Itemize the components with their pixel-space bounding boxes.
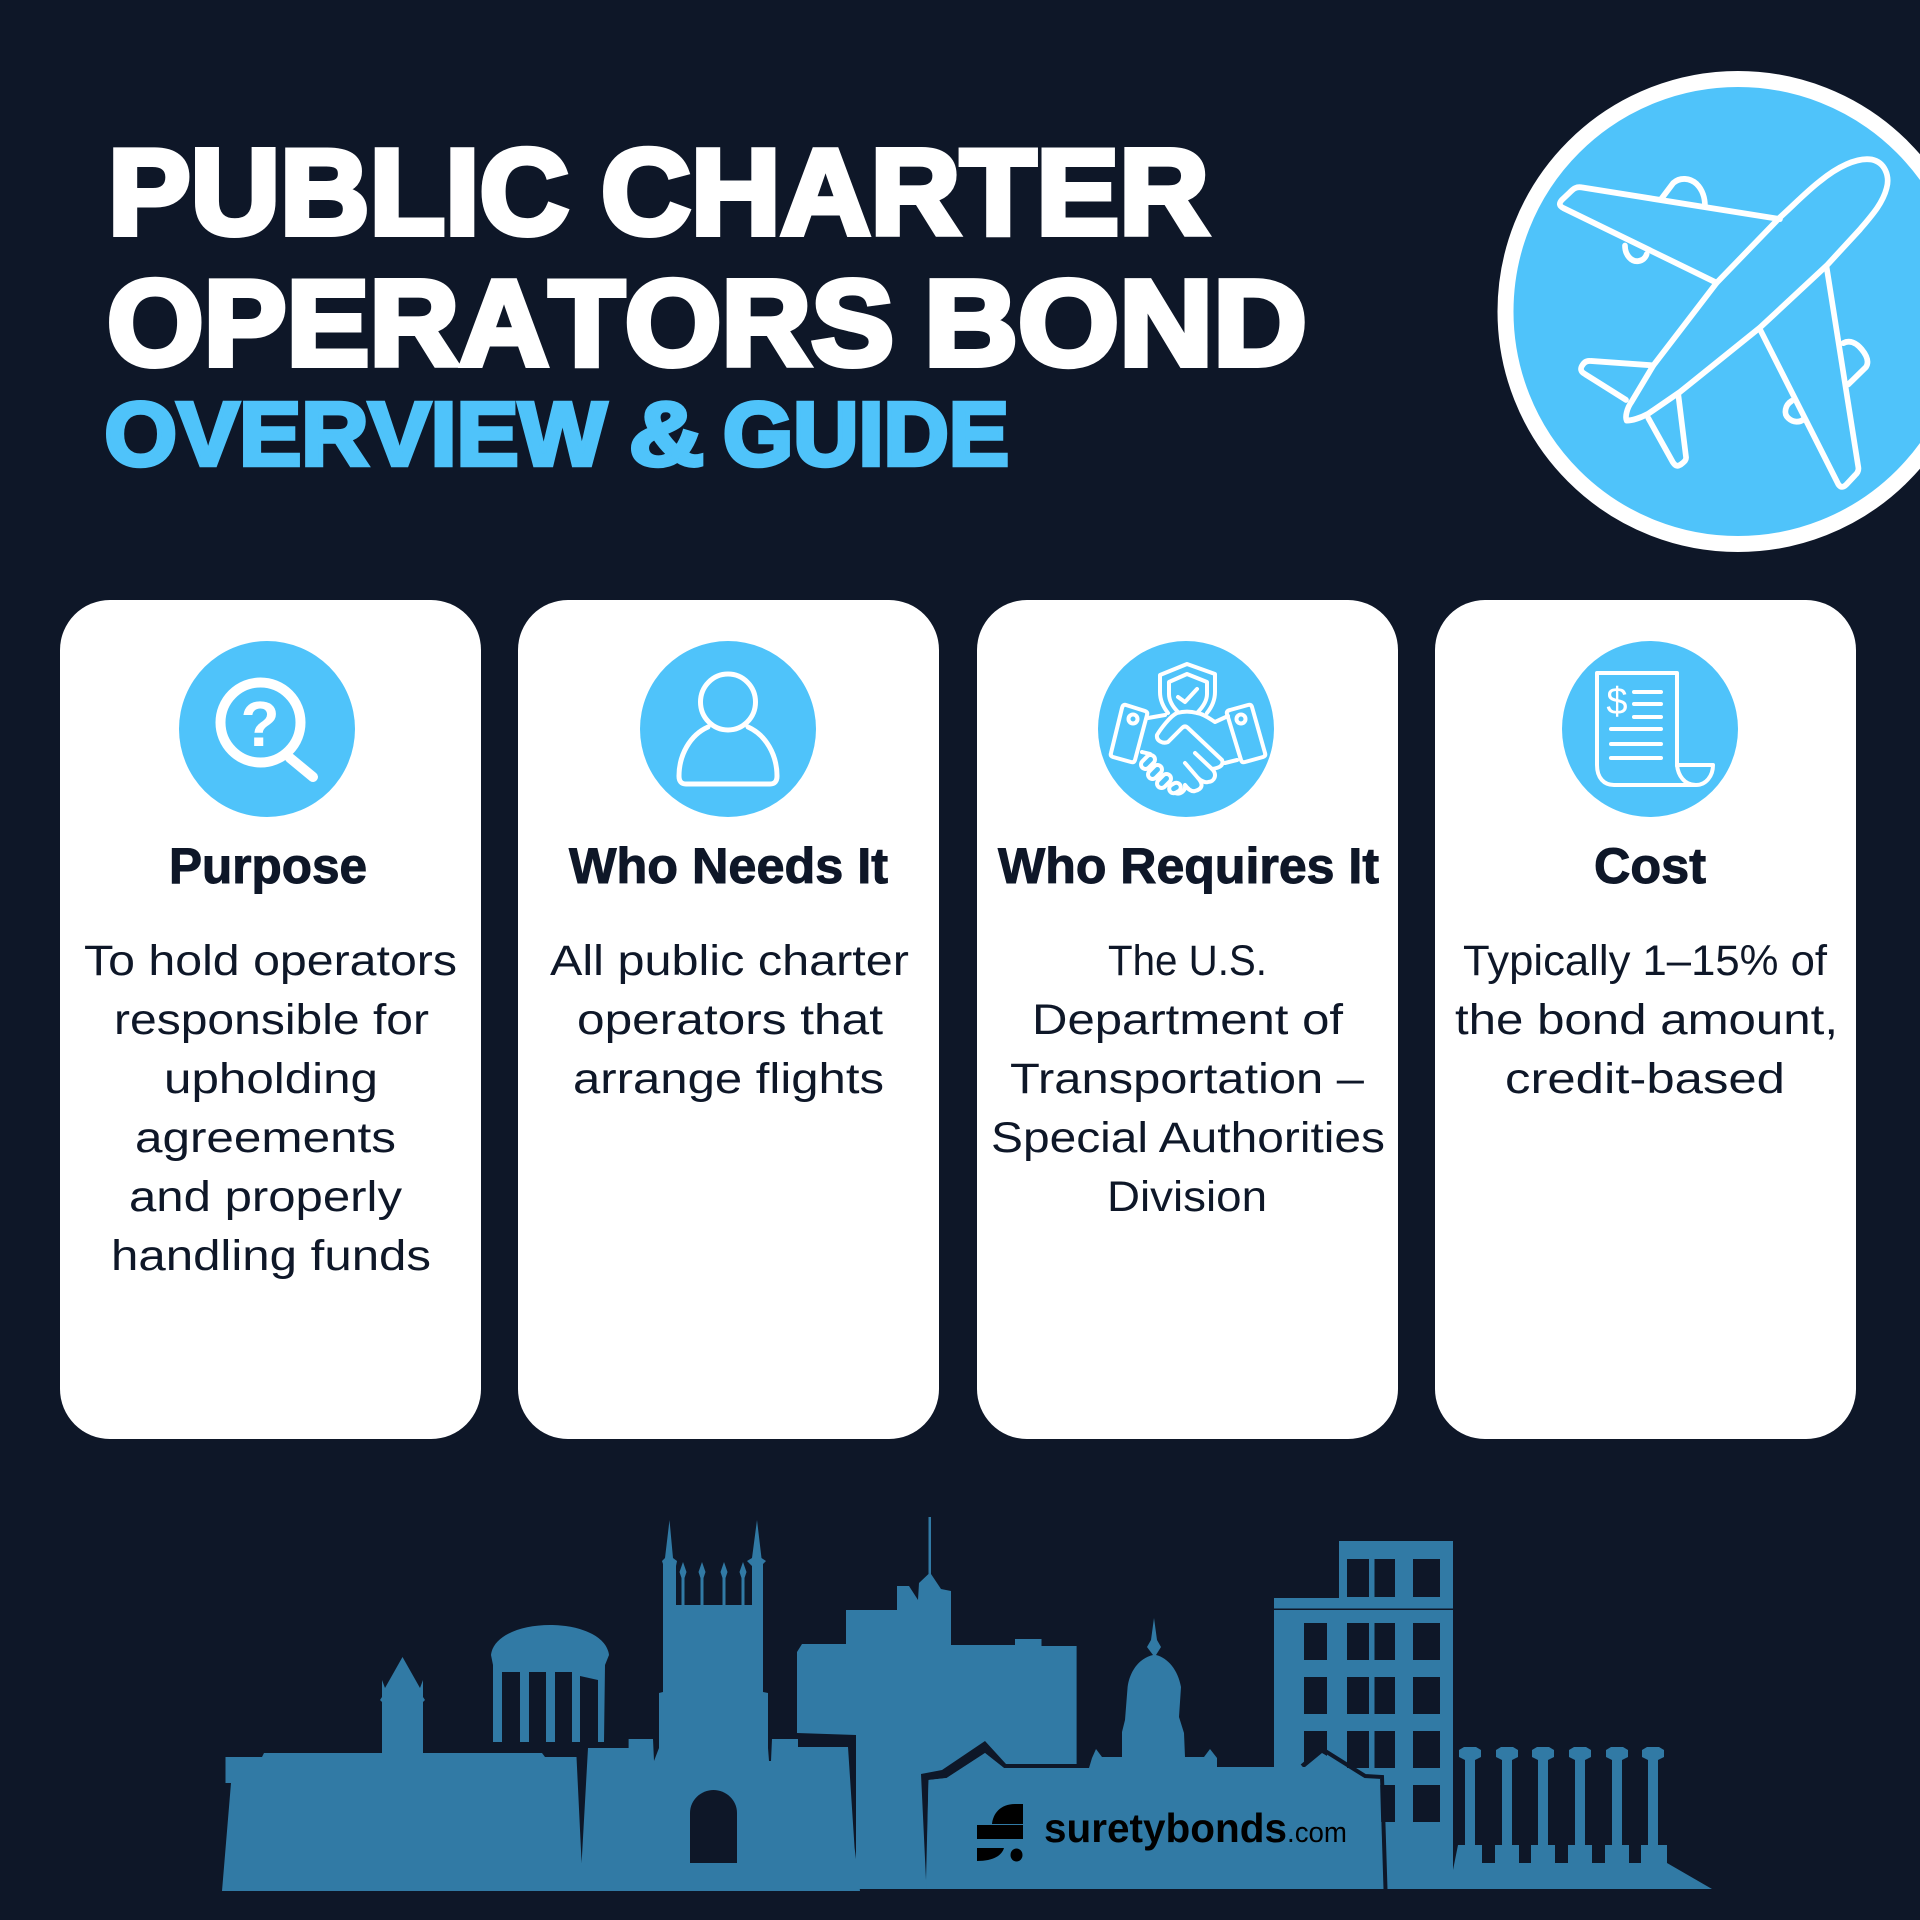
heading: who requires it: Who Requires It: [998, 838, 1379, 894]
text block: who needs it: [550, 937, 909, 1103]
subtitle: [104, 385, 1009, 485]
panel: who needs it: [518, 600, 939, 1439]
text block: who requires it: Special Authorities: [991, 1114, 1385, 1162]
icon: invoice document: $: [1606, 681, 1628, 723]
skyline illustration: [222, 1517, 1712, 1891]
logo: [977, 1804, 1347, 1862]
subtitle: &: [629, 385, 704, 485]
text block: who requires it: Division: [1107, 1173, 1267, 1221]
text block: cost: credit-based: [1505, 1055, 1785, 1103]
title: OPERATORS: [107, 255, 894, 391]
text block: purpose: upholding: [164, 1055, 378, 1103]
icon: person: [679, 674, 777, 784]
text block: purpose: [84, 937, 457, 1280]
colonnade: [1453, 1747, 1712, 1889]
heading: purpose: Purpose: [169, 838, 367, 894]
tower arched door: [690, 1790, 737, 1863]
text block: purpose: handling funds: [111, 1232, 431, 1280]
text block: cost: the bond amount,: [1455, 996, 1838, 1044]
text block: who needs it: arrange flights: [573, 1055, 884, 1103]
text block: who requires it: The U.S.: [1108, 937, 1267, 985]
left hall, clock tower and gothic tower: [222, 1520, 860, 1891]
panel: who requires it: [977, 600, 1398, 1439]
text block: who needs it: All public charter: [550, 937, 909, 985]
text block: purpose: To hold operators: [84, 937, 457, 985]
text block: cost: Typically 1–15% of: [1463, 937, 1828, 985]
icon: invoice document: [1597, 673, 1713, 785]
central block with spire: [797, 1517, 1090, 1889]
dark gable outline: [921, 1741, 1094, 1880]
logo mark: [977, 1804, 1023, 1862]
icon: magnifier with question mark: [220, 682, 313, 777]
front hall with domed capitol: [926, 1618, 1383, 1889]
subtitle: GUIDE: [723, 385, 1009, 485]
text block: purpose: responsible for: [114, 996, 429, 1044]
text block: who needs it: operators that: [577, 996, 883, 1044]
panel: cost: [1435, 600, 1856, 1439]
text block: purpose: and properly: [129, 1173, 403, 1221]
logo wordmark: suretybonds: [1044, 1805, 1287, 1851]
panel: purpose: [60, 600, 481, 1439]
text block: cost: [1455, 937, 1838, 1103]
rotunda: [491, 1625, 609, 1742]
icon: airplane badge: [1506, 79, 1920, 544]
text block: purpose: agreements: [135, 1114, 396, 1162]
title: BOND: [924, 255, 1307, 391]
text block: who requires it: [991, 937, 1385, 1221]
icon: magnifier with question mark: ?: [240, 688, 280, 760]
text block: who requires it: Transportation –: [1010, 1055, 1364, 1103]
title: PUBLIC: [108, 124, 569, 260]
subtitle: OVERVIEW: [104, 385, 607, 485]
icon: handshake with shield: [1111, 664, 1265, 795]
title: [104, 124, 1307, 485]
logo: .com: [1287, 1817, 1347, 1849]
title: CHARTER: [601, 124, 1209, 260]
text block: who requires it: Department of: [1032, 996, 1344, 1044]
heading: cost: Cost: [1594, 838, 1706, 894]
heading: who needs it: Who Needs It: [569, 838, 888, 894]
tall building with windows: [1274, 1541, 1453, 1889]
